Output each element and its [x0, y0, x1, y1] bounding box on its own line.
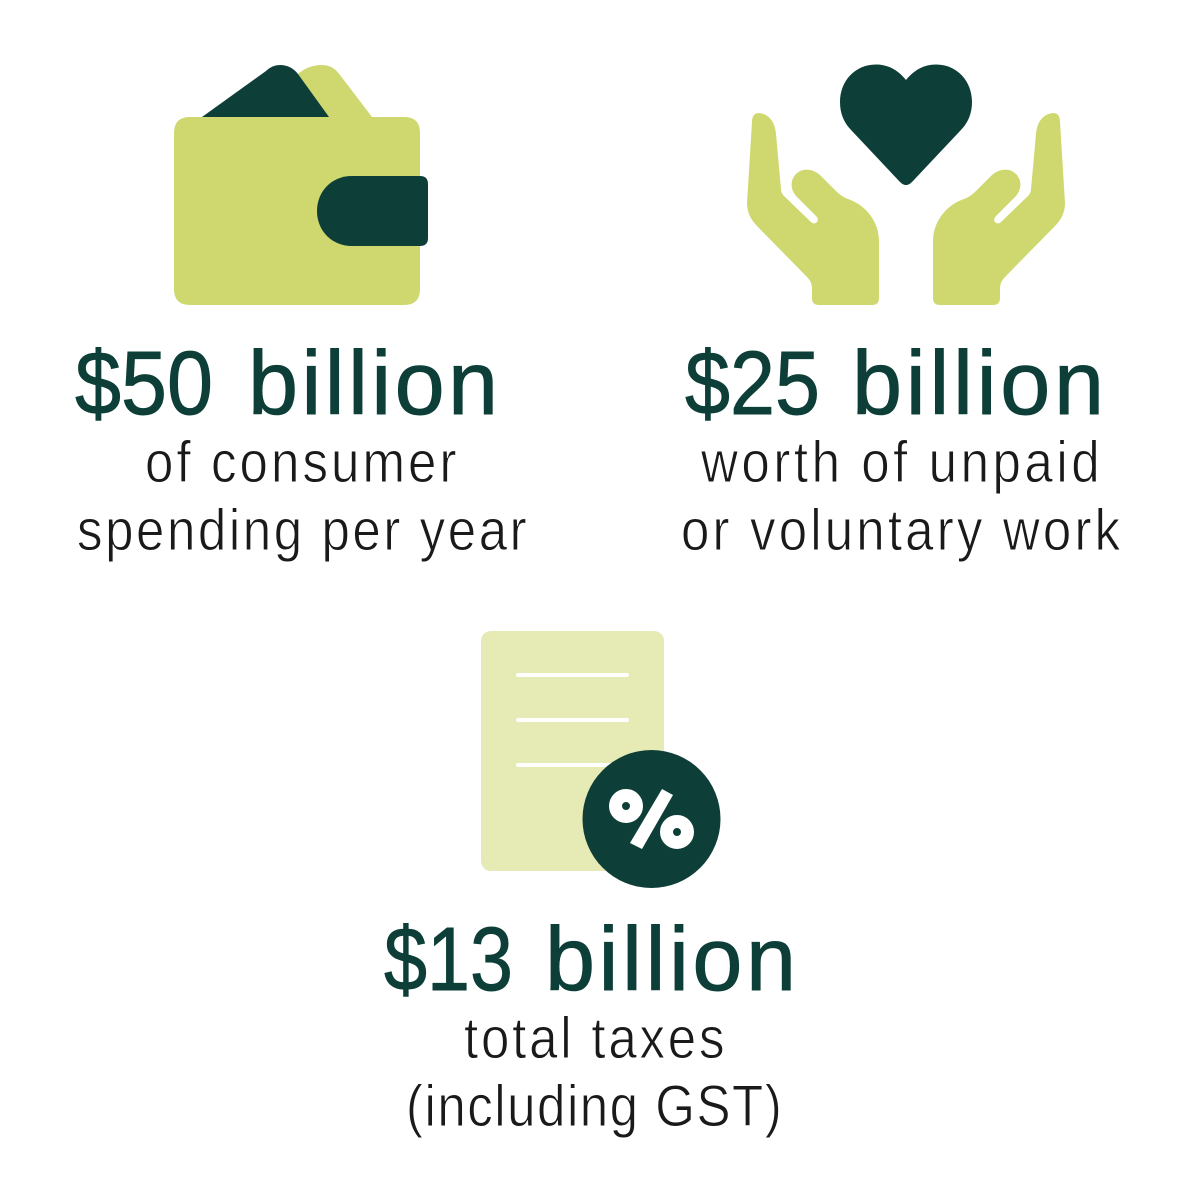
text: worth of unpaid: worth of unpaid [700, 430, 1100, 495]
text: of consumer: of consumer [145, 430, 457, 495]
heading: $13 billion [384, 910, 796, 1010]
text: total taxes: total taxes [464, 1006, 724, 1071]
heading: $25 billion [685, 334, 1104, 434]
icon: right hand [933, 113, 1065, 305]
text: spending per year: spending per year [77, 498, 527, 563]
panel: taxes [384, 631, 796, 1139]
icon: heart [840, 64, 972, 185]
icon: heart and hands [747, 64, 1065, 305]
panel: unpaid work [681, 64, 1121, 563]
icon: wallet [174, 65, 428, 305]
heading: $50 billion [75, 334, 498, 434]
text: (including GST): (including GST) [406, 1074, 782, 1139]
icon: left hand [747, 113, 879, 305]
text: or voluntary work: or voluntary work [681, 498, 1121, 563]
panel: consumer spending [75, 65, 527, 563]
icon: tax document with percent badge [481, 631, 720, 888]
heading: $25 billion: $25 [685, 334, 820, 434]
heading: $13 billion: billion [545, 910, 796, 1010]
heading: $25 billion: billion [852, 334, 1104, 434]
heading: $50 billion: billion [248, 334, 498, 434]
heading: $13 billion: $13 [384, 910, 513, 1010]
heading: $50 billion: $50 [75, 334, 213, 434]
